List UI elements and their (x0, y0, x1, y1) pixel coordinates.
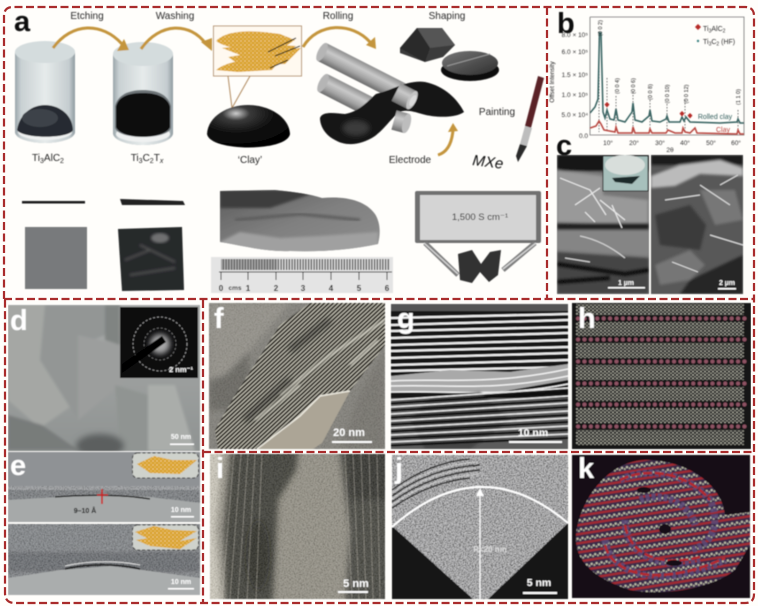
single flake TEM: 9–10 Å (74, 506, 96, 515)
arrow: rolling (303, 28, 376, 49)
legend (695, 24, 735, 48)
label: Ti3AlC2: AlC (44, 153, 60, 164)
legend: 3 (709, 28, 712, 34)
panel k: spiral atomic model (572, 453, 750, 598)
x axis labels: 2θ (666, 147, 674, 154)
TEM image: 50 nm (171, 434, 191, 441)
axes (590, 17, 744, 135)
SEM image left: 1 µm (618, 280, 634, 287)
label: rolled clay: Rolled clay (698, 114, 733, 121)
label: clay: Clay (716, 127, 730, 134)
conductivity test device: 1,500 S cm⁻¹ (452, 212, 508, 223)
panel d: TEM image with diffraction inset (8, 305, 200, 458)
label: Ti3C2Tx: Ti (131, 153, 139, 164)
panel g: layered TEM (391, 303, 568, 449)
legend: Ti (703, 26, 709, 33)
x axis labels: 10° (603, 139, 613, 147)
y axis labels: 5.0 × 10⁴ (562, 112, 588, 119)
y axis labels: 8.0 × 10⁵ (562, 32, 588, 39)
heading: panel a: a (14, 6, 31, 38)
heading: panel c: c (556, 130, 572, 162)
x axis labels: 30° (655, 139, 665, 147)
label: Washing: Washing (156, 11, 194, 22)
double flake TEM: 10 nm (171, 579, 191, 586)
label: Rolling: Rolling (323, 11, 353, 22)
TEM image: 20 nm (333, 427, 365, 439)
peak labels (598, 20, 742, 105)
x axis labels: 20° (629, 139, 639, 147)
legend: (HF) (719, 39, 735, 46)
y axis labels: 1.5 × 10⁵ (562, 72, 588, 79)
peak symbols (604, 102, 692, 118)
shaping mould and disc (400, 28, 499, 81)
inset double flake (132, 525, 198, 550)
diffraction inset (120, 307, 198, 378)
legend: 3 (709, 42, 712, 48)
legend: C (711, 39, 716, 46)
inset flake (132, 453, 198, 478)
x axis labels: 60° (731, 139, 741, 147)
line: rolled clay (590, 33, 744, 123)
film side view: left (22, 201, 85, 204)
SEM image right: 2 µm (719, 280, 735, 287)
arrow: washing (141, 28, 212, 51)
label: Ti3C2Tx: x (159, 158, 164, 165)
ruler: cms (228, 285, 242, 292)
label: Painting: Painting (479, 107, 515, 118)
heading: panel f: f (214, 303, 224, 335)
peak labels: (1 1 0) (736, 89, 742, 105)
x axis labels (603, 139, 741, 154)
line: clay (590, 121, 744, 134)
panel f: layered TEM (209, 303, 385, 449)
peak labels: (0 0 6) (631, 78, 637, 94)
SEM image right (651, 155, 743, 294)
clay dome (207, 105, 290, 148)
heading: panel d: d (10, 305, 28, 337)
panel h: atomic model (572, 303, 751, 449)
panel i: HRTEM (209, 453, 386, 600)
diffraction inset: 2 nm⁻¹ (169, 365, 193, 374)
ruler: 3 (301, 284, 306, 293)
heading: panel e: e (10, 450, 26, 482)
panel b: XRD chart (549, 8, 744, 154)
arrow: etching (53, 28, 129, 51)
legend: 2 (716, 42, 719, 48)
ruler: 2 (274, 284, 279, 293)
inset: clay layered structure (214, 26, 302, 108)
panel j: curved HRTEM (392, 453, 568, 599)
heading: panel b: b (557, 8, 575, 40)
rolled clay sheet (218, 188, 382, 254)
peak labels: (0 0 8) (648, 84, 654, 100)
peak labels: (0 0 12) (684, 84, 690, 103)
heading: panel g: g (397, 303, 415, 335)
label: Ti3AlC2: Ti (32, 153, 40, 164)
heading: panel k: k (578, 453, 595, 485)
peak labels: (0 0 2) (598, 20, 604, 36)
panel i: HRTEM: 5 nm (343, 578, 369, 590)
y axis labels: 1.0 × 10⁵ (562, 92, 588, 99)
ruler: 6 (385, 284, 390, 293)
heading: panel i: i (216, 453, 224, 485)
peak labels: (0 0 10) (665, 84, 671, 103)
rollers and sheet (314, 41, 464, 144)
ruler: 5 (357, 284, 362, 293)
TEM image (391, 304, 568, 449)
label: Ti3C2Tx: 3 (139, 158, 143, 165)
label: Ti3AlC2: 3 (40, 158, 44, 165)
single flake TEM: 10 nm (171, 507, 191, 514)
x axis labels: 40° (680, 139, 690, 147)
label: Clay: ‘Clay’ (238, 155, 262, 166)
ruler: 1 (246, 284, 251, 293)
film: dark square (118, 227, 184, 291)
panel c: SEM images (556, 130, 743, 294)
y axis labels: 6.0 × 10⁵ (562, 49, 588, 56)
TEM image: 10 nm (518, 427, 548, 439)
label: Etching: Etching (70, 11, 104, 22)
film side view: right (120, 199, 185, 205)
heading: panel h: h (578, 303, 596, 335)
panel j: curved HRTEM: 5 nm (527, 577, 551, 589)
painted MXene signature: MXe (472, 152, 504, 173)
TEM image (209, 303, 385, 449)
beaker: Ti3C2Tx (113, 42, 173, 145)
x axis labels: 50° (706, 139, 716, 147)
label: Ti3AlC2: 2 (60, 158, 64, 165)
heading: panel j: j (394, 453, 403, 485)
legend: AlC (711, 26, 723, 33)
legend: 2 (723, 28, 726, 34)
TEM image (8, 305, 200, 458)
conductivity test device (415, 191, 541, 283)
SEM image left (557, 155, 649, 294)
label: Ti3C2Tx: 2 (150, 158, 154, 165)
arrow: rolling to electrode (438, 123, 458, 155)
label: Ti3C2Tx: C (143, 153, 150, 164)
panel a: clay synthesis process (14, 6, 544, 293)
label: Electrode: Electrode (389, 155, 432, 166)
film: gray square (25, 227, 87, 289)
single flake TEM (8, 452, 200, 522)
beaker: Ti3AlC2 (15, 41, 75, 143)
double flake TEM (8, 524, 200, 595)
y axis labels: 0.0 (579, 133, 588, 140)
legend: Ti (703, 39, 709, 46)
ruler: 0 (219, 284, 224, 293)
icon: paint brush (516, 76, 544, 162)
label: Shaping: Shaping (429, 11, 465, 22)
y axis labels: Offset Intensity (549, 61, 556, 103)
y axis labels (549, 32, 588, 140)
panel e: TEM of single and double flakes (8, 450, 200, 595)
peak labels: (0 0 4) (615, 78, 621, 94)
ruler (211, 257, 393, 293)
ruler: 4 (329, 284, 334, 293)
dotted peak markers (599, 32, 738, 132)
panel j: curved HRTEM: R<20 nm (473, 545, 507, 554)
label: Ti3C2Tx: T (154, 153, 160, 164)
